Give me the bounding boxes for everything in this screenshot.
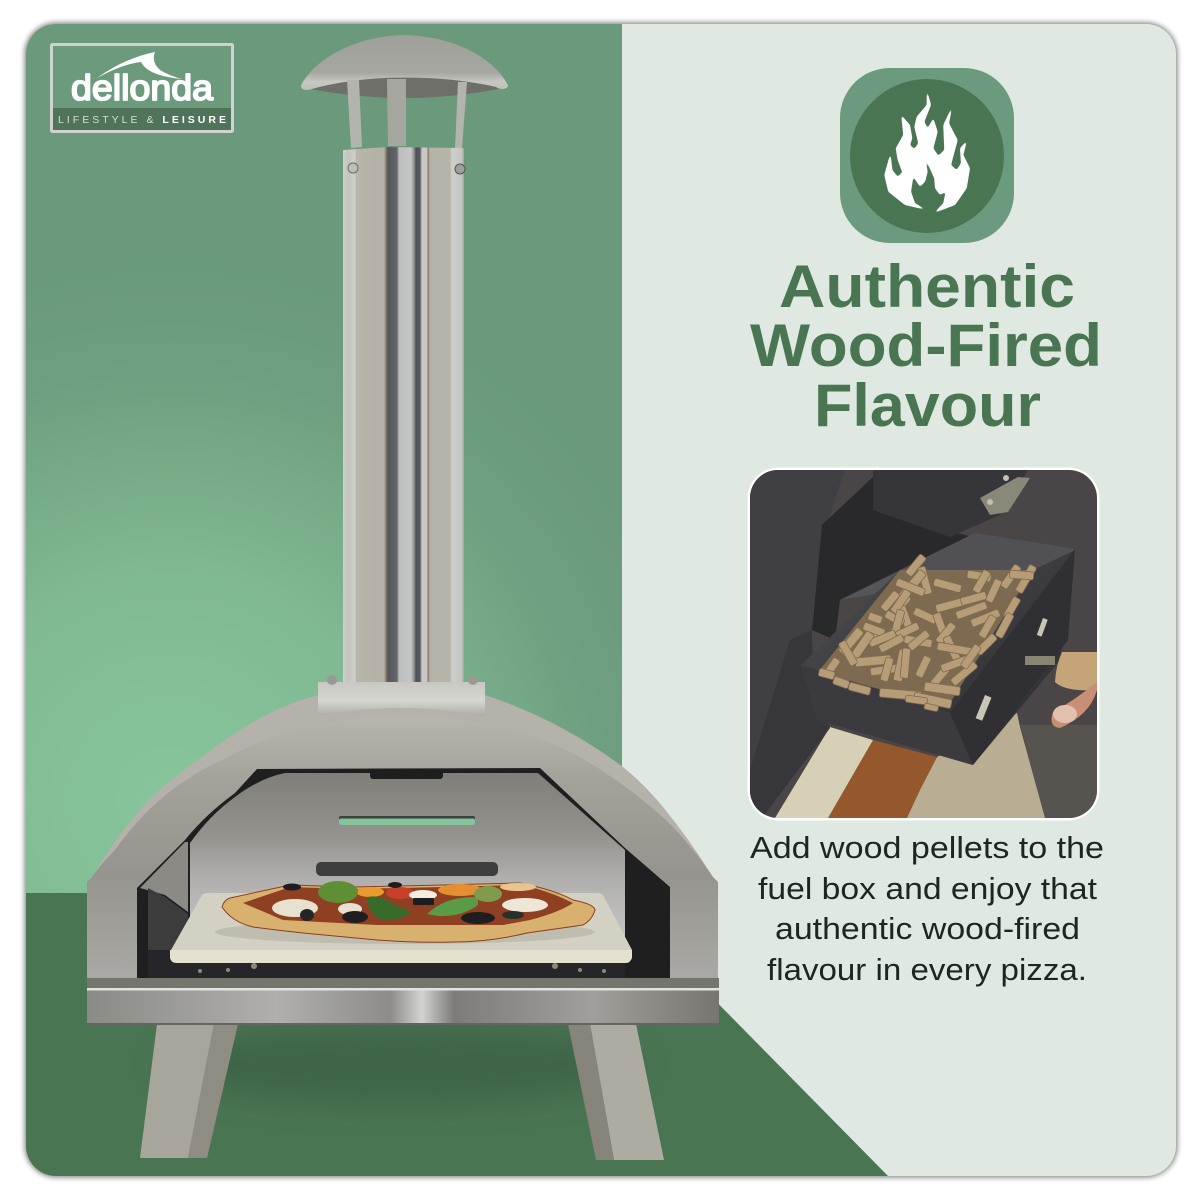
- oven body: [750, 470, 845, 818]
- top box with hinge: [873, 470, 1030, 537]
- vent holes: [976, 618, 1048, 721]
- chimney struts: [347, 79, 467, 148]
- left side panel: [140, 842, 188, 912]
- logo tagline: LIFESTYLE & LEISURE: [58, 114, 226, 126]
- heading: Authentic: [779, 253, 1075, 320]
- handle and hand: [1025, 652, 1097, 728]
- chimney pipe: [343, 147, 465, 690]
- oven legs: [140, 1024, 664, 1160]
- oven opening: [137, 768, 670, 978]
- logo wordmark: dellonda: [71, 67, 214, 108]
- fuel box: [801, 533, 1097, 765]
- description text: authentic wood-fired: [775, 911, 1080, 946]
- wooden board: [828, 740, 937, 818]
- back wall: [190, 773, 625, 950]
- heading: Wood-Fired: [750, 312, 1102, 379]
- pizza oven: [87, 35, 719, 1160]
- description text: [750, 830, 1104, 987]
- floor shadow: [222, 1025, 582, 1105]
- bolts: [198, 963, 606, 973]
- dark green floor: [26, 893, 888, 1176]
- description text: flavour in every pizza.: [767, 952, 1087, 987]
- pizza stone: [170, 893, 632, 963]
- vents: [316, 769, 498, 876]
- pellets: [818, 570, 1033, 708]
- left green panel: [26, 24, 622, 894]
- icon: flame: [884, 89, 970, 213]
- sauce: [243, 885, 573, 925]
- chimney: [301, 35, 508, 690]
- photo: fuel box with wood pellets: [748, 468, 1100, 820]
- heading: Flavour: [814, 372, 1041, 439]
- flue flange: [318, 675, 485, 716]
- heading: [750, 253, 1102, 439]
- description text: fuel box and enjoy that: [758, 871, 1097, 906]
- chimney cap: [301, 35, 508, 98]
- oven inner floor: [148, 950, 625, 978]
- lower left inner wall: [148, 888, 188, 976]
- paving background: [750, 470, 1097, 818]
- oven dome: [87, 675, 719, 1025]
- logo wave: [97, 52, 182, 79]
- terrazzo slab: [775, 727, 873, 818]
- toppings: [272, 881, 548, 924]
- icon: flame badge: [840, 68, 1014, 243]
- inner panel: [812, 477, 968, 638]
- oven shelf: [87, 988, 719, 1025]
- description text: Add wood pellets to the: [750, 830, 1104, 865]
- crust: [222, 883, 595, 942]
- logo: dellonda: [52, 44, 232, 132]
- pizza: [222, 881, 595, 942]
- front rim: [87, 716, 718, 990]
